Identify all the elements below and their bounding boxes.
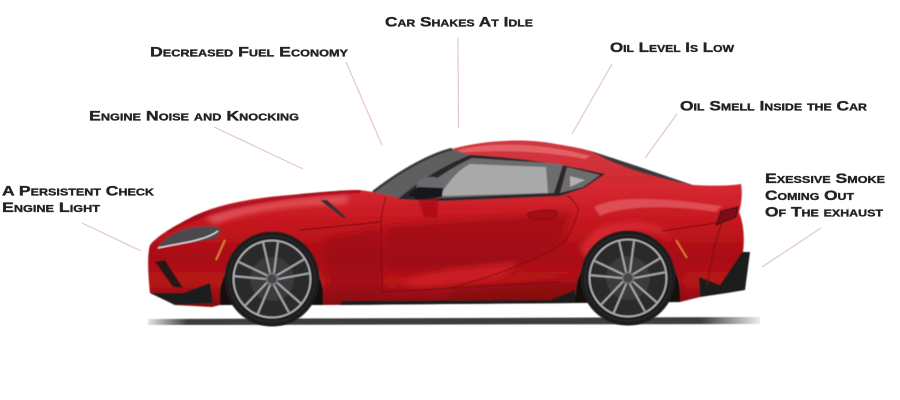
- label: coming out: Coming Out: [765, 187, 854, 203]
- label: decreased fuel economy: Decreased Fuel Economy: [150, 44, 348, 60]
- front wheel: [224, 232, 320, 326]
- roof highlight: [458, 145, 590, 159]
- ground shadow: [148, 317, 760, 325]
- front marker: [216, 240, 225, 260]
- front fender shade: [325, 225, 382, 300]
- side mirror: [408, 177, 443, 200]
- rear lower shade: [450, 270, 680, 305]
- front grille: [155, 260, 183, 288]
- rear marker: [676, 240, 687, 258]
- label: of the exhaust: Of The exhaust: [765, 204, 883, 220]
- label: persistent check engine light, second line: Engine Light: [2, 199, 100, 215]
- window frame: [398, 155, 605, 201]
- label: persistent check engine light: A Persistent Check: [2, 182, 155, 198]
- hood edge shade: [160, 188, 360, 232]
- car body: [148, 141, 744, 307]
- rear glass strip: [590, 151, 693, 185]
- side window: [412, 158, 563, 198]
- windshield: [373, 149, 470, 198]
- door lower highlight: [400, 262, 520, 287]
- callout lines: [82, 38, 821, 267]
- label: car shakes at idle: Car Shakes At Idle: [385, 14, 533, 30]
- car illustration: [148, 141, 750, 326]
- side window light glass: [440, 164, 548, 196]
- label: excessive smoke: Exessive Smoke: [765, 170, 885, 186]
- arch shadow rear: [575, 241, 680, 303]
- arch highlight rear: [580, 222, 672, 262]
- door dark area: [385, 212, 572, 272]
- label: oil smell inside the car: Oil Smell Inside the Car: [680, 98, 868, 114]
- hood highlight: [205, 196, 350, 224]
- callout labels: [2, 14, 885, 220]
- label: oil level is low: Oil Level Is Low: [610, 39, 735, 55]
- arch shadow front: [220, 245, 323, 305]
- rear wheel: [580, 230, 676, 326]
- rear bumper black: [699, 252, 750, 297]
- fender vent: [320, 200, 347, 218]
- headlight: [157, 226, 220, 248]
- label: engine noise and knocking: Engine Noise and Knocking: [89, 108, 299, 124]
- sill black: [340, 290, 576, 305]
- mirror reflection: [418, 198, 438, 218]
- body panel lines: [300, 195, 722, 292]
- infographic: car symptoms diagram: [2, 16, 885, 328]
- quarter window light: [570, 176, 585, 187]
- rear haunch highlight: [594, 199, 722, 216]
- quarter window: [560, 167, 600, 193]
- front splitter: [150, 283, 213, 305]
- door handle: [527, 210, 557, 220]
- windshield top edge: [373, 149, 452, 192]
- body shading: [160, 145, 722, 305]
- tail light: [716, 207, 738, 225]
